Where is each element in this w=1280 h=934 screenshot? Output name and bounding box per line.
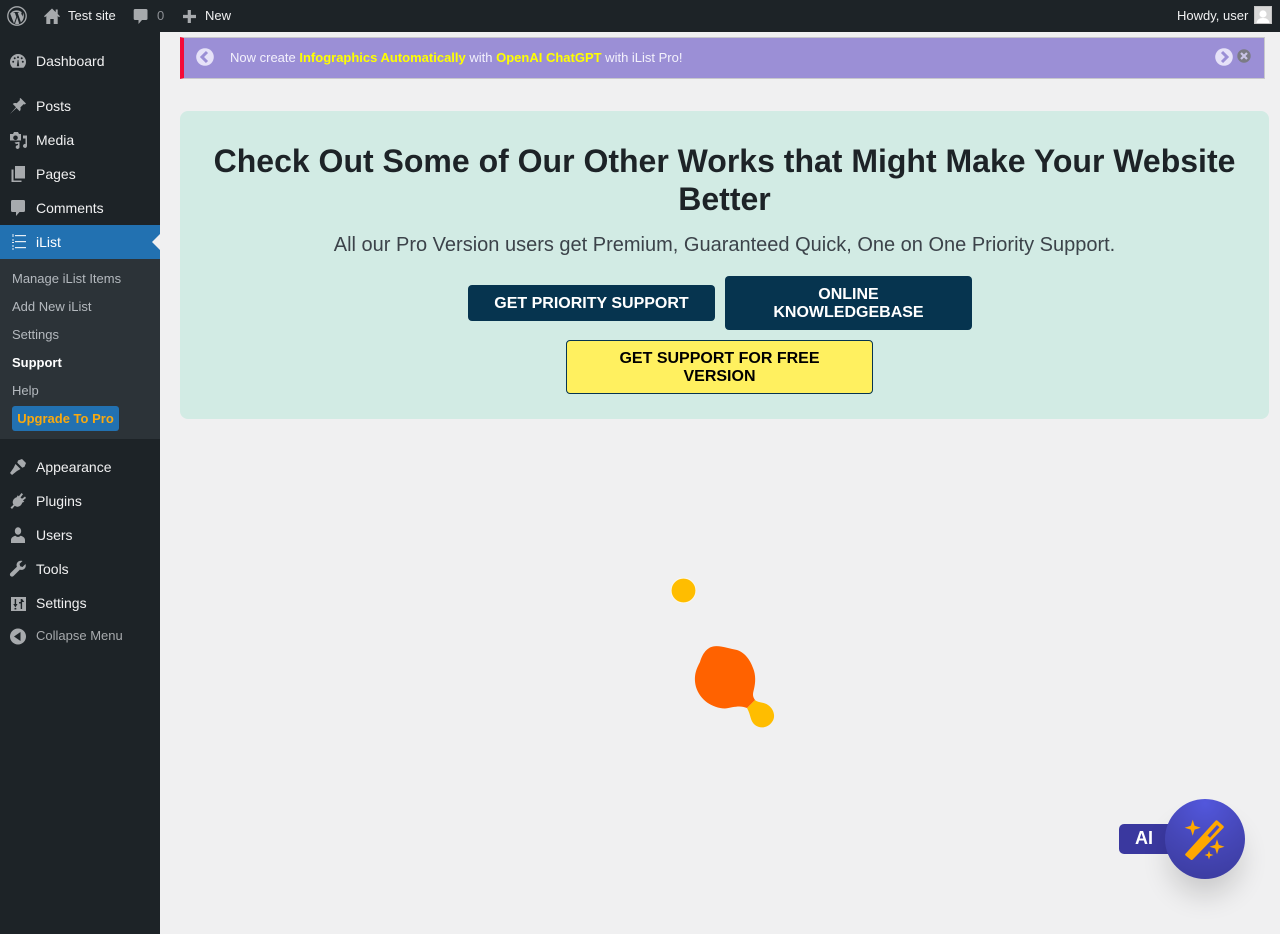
menu item: tools: Tools [36, 561, 69, 577]
icon: avatar [1254, 6, 1272, 24]
button: free version support: GET SUPPORT FOR FREE VERSION [619, 350, 820, 385]
comment count: 0 [157, 8, 164, 23]
icon: comments [134, 9, 148, 24]
label: iList [36, 234, 61, 250]
circular button [1165, 799, 1245, 879]
current arrow [152, 234, 160, 250]
menu item: comments: Comments [36, 200, 104, 216]
button: knowledgebase [725, 276, 972, 330]
loading animation [671, 578, 774, 728]
support panel [180, 111, 1269, 419]
admin top bar [0, 0, 1280, 32]
icon: previous arrow [196, 48, 214, 66]
icon: collapse [10, 628, 26, 644]
blob: lower yellow [747, 700, 774, 727]
menu item: appearance: Appearance [36, 459, 112, 475]
dot: upper yellow [671, 578, 696, 603]
site name: Test site [68, 8, 116, 23]
icon: magic wand [1184, 820, 1224, 860]
AI tag [1119, 824, 1179, 854]
icon: close [1237, 49, 1251, 63]
menu item: dashboard: Dashboard [36, 53, 104, 69]
icon: list [12, 234, 26, 250]
menu item: media: Media [36, 132, 74, 148]
submenu item: current: Support [12, 355, 62, 370]
collapse menu [10, 628, 123, 644]
AI tag: AI [1135, 828, 1153, 848]
menu item: users [11, 527, 73, 543]
icon: home [44, 8, 60, 24]
new link: New [205, 8, 231, 23]
icon: next arrow [1215, 48, 1233, 66]
submenu item: Settings [12, 327, 59, 342]
sidebar menu [0, 32, 160, 934]
menu item: media [10, 132, 74, 149]
menu item: plugins [10, 493, 82, 509]
upgrade badge: Upgrade To Pro [17, 411, 114, 426]
menu item: iList active [0, 225, 160, 259]
notice text: Now create Infographics Automatically with OpenAI ChatGPT with iList Pro! [230, 50, 682, 65]
menu item: settings: Settings [36, 595, 87, 611]
button: knowledgebase: ONLINE KNOWLEDGEBASE [773, 286, 924, 321]
submenu [0, 259, 160, 439]
subheading: All our Pro Version users get Premium, Guaranteed Quick, One on One Priority Support. [334, 234, 1115, 256]
upgrade badge [12, 406, 119, 431]
menu item: pages [12, 166, 76, 182]
menu item: users: Users [36, 527, 73, 543]
greeting: Howdy, user [1177, 8, 1248, 23]
menu item: posts [10, 98, 71, 114]
button: free version support [566, 340, 873, 394]
submenu item: Add New iList [12, 299, 91, 314]
notice banner [180, 37, 1265, 79]
menu item: posts: Posts [36, 98, 71, 114]
heading: Check Out Some of Our Other Works that Might Make Your Website Better [214, 143, 1235, 217]
submenu item: Manage iList Items [12, 271, 121, 286]
menu item: settings [11, 595, 87, 611]
button: priority support: GET PRIORITY SUPPORT [494, 295, 689, 312]
AI floating button [1119, 799, 1250, 904]
label: Collapse Menu [36, 628, 123, 643]
submenu item: Help [12, 383, 39, 398]
menu item: pages: Pages [36, 166, 76, 182]
icon: plus [183, 10, 196, 23]
menu item: tools [10, 560, 69, 577]
button: priority support [468, 285, 715, 321]
menu item: plugins: Plugins [36, 493, 82, 509]
blob: orange [695, 646, 755, 708]
icon: wordpress logo [7, 6, 27, 26]
